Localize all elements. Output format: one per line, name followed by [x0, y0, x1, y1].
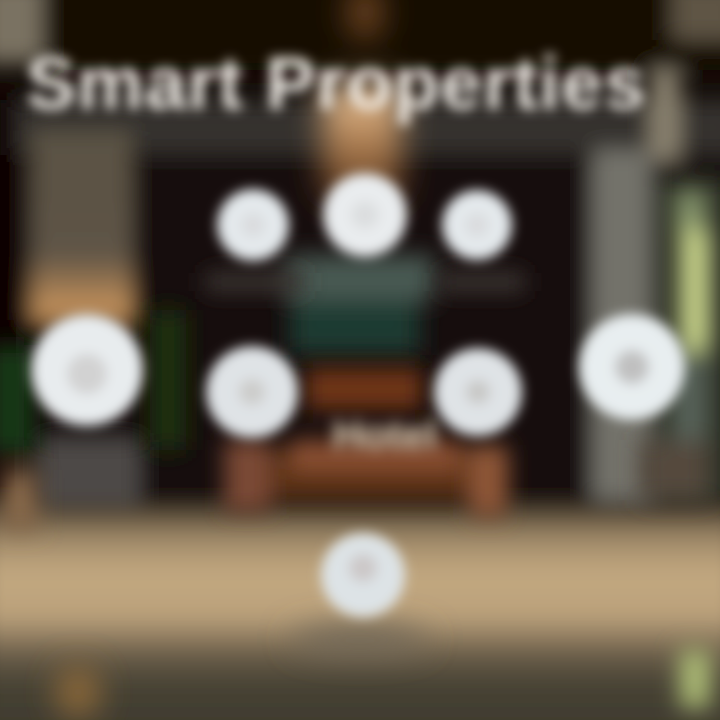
icon: top left circle — [217, 189, 289, 261]
icon: far right circle — [579, 314, 685, 420]
icon: middle right circle — [434, 348, 522, 436]
icon: top center circle — [323, 173, 407, 257]
center label: Hotel — [332, 411, 438, 458]
icon: top right circle — [442, 190, 512, 260]
title: Smart Properties — [26, 41, 646, 125]
icon: middle left circle — [206, 346, 298, 438]
icon: bottom circle — [321, 533, 405, 617]
icon: far left circle — [31, 314, 143, 426]
